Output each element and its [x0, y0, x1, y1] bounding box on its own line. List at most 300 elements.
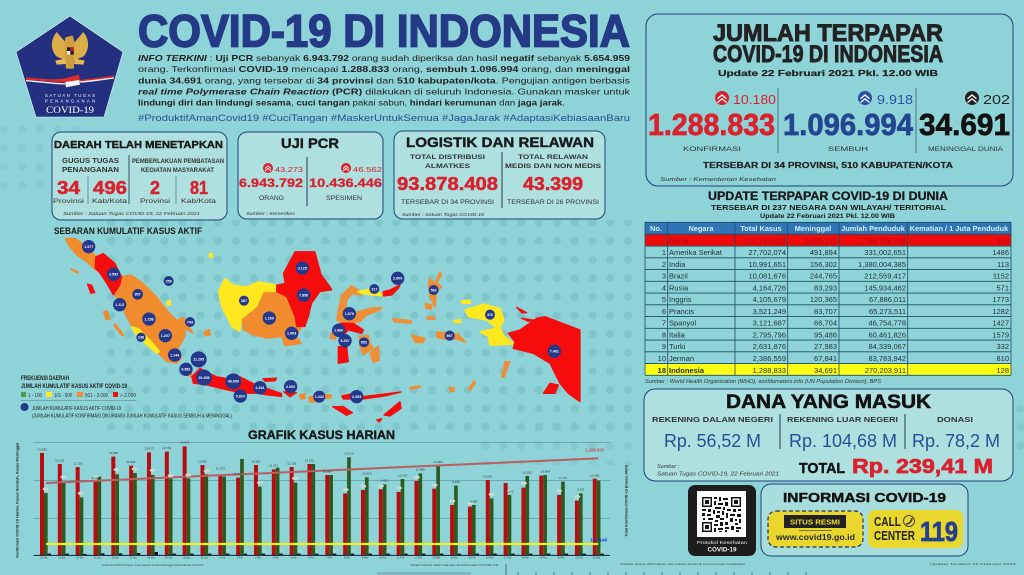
heading: DANA YANG MASUK [726, 392, 931, 413]
value labels over bars: 11.992 [252, 459, 261, 463]
logo text: SATUAN TUGAS [45, 93, 95, 98]
date axis labels: 21 Feb [575, 558, 583, 560]
source: Sumber : [657, 464, 680, 470]
map markers: active case bubbles: 1.960 [334, 329, 343, 333]
text block: info terkini [138, 53, 631, 108]
rows: countries: 1773 [992, 295, 1009, 304]
date axis labels: 18 Feb [522, 558, 530, 560]
heading: world update: UPDATE TERPAPAR COVID-19 DI DUNIA [708, 191, 948, 203]
row: dunia: 315 [996, 236, 1009, 246]
date axis labels: 28 Jan [147, 558, 155, 560]
row: indonesia: 128 [996, 366, 1009, 375]
deltas: 46.562 [353, 165, 382, 174]
value labels over bars: 11.992 [198, 459, 207, 463]
map markers: active case bubbles: 957 [135, 293, 141, 297]
row: dunia [669, 236, 1009, 246]
value labels over bars: 8.231 [577, 488, 585, 492]
map markers: active case bubbles [82, 240, 561, 403]
rows: countries: Jerman [669, 354, 694, 363]
rows: countries: 27,983 [814, 342, 837, 351]
rows: countries: 4,105,679 [753, 295, 786, 304]
map legend: JUMLAH KUMULATIF KASUS AKTIF COVID-19 [32, 406, 121, 412]
rows: countries: 3 [662, 272, 666, 281]
big figures: 1.288.833 [648, 107, 775, 142]
date axis labels [40, 558, 601, 560]
value labels over bars: 10.355 [362, 472, 372, 476]
total: TOTAL [799, 460, 845, 477]
map markers: active case bubbles: 48.650 [228, 380, 239, 384]
subheads: TOTAL DISTRIBUSI [410, 154, 485, 161]
heading: chart: GRAFIK KASUS HARIAN [248, 428, 395, 442]
table source: Sumber : World Health Organization (WHO), worldometers.info (UN Population Division), BPS [645, 379, 881, 385]
value labels over bars: 10.133 [398, 473, 408, 477]
map markers: active case bubbles: 7.461 [550, 350, 559, 354]
date axis labels: 4 Feb [273, 558, 279, 560]
map markers: active case bubbles: 11.195 [193, 358, 204, 362]
heading: COVID-19 DI INDONESIA [713, 41, 943, 68]
date axis labels: 24 Jan [76, 558, 84, 560]
table header: Total Kasus [740, 224, 782, 233]
panel: dana yang masuk [644, 389, 1013, 481]
value labels over bars: 11.726 [287, 461, 296, 465]
map markers: active case bubbles: 2.092 [286, 385, 295, 389]
row: dunia: Dunia [669, 236, 689, 246]
text block: info terkini: dunia 34.691 orang, yang tersebar di 34 provinsi dan 510 kabupaten/kota . Pengujian antigen berbasis [138, 76, 630, 86]
deltas: 9.918 [877, 92, 913, 107]
table header: Kematian / 1 Juta Penduduk [910, 224, 1009, 233]
chart footnotes: Konfirmasi COVID-19 Harian, Kasus Sembuh & Kasus Meninggal Total Konfirmasi COVID-19 [102, 563, 204, 567]
subheads: GUGUS TUGAS [62, 158, 119, 165]
row: indonesia: 270,203,911 [865, 366, 906, 375]
map markers: active case bubbles: 1.603 [287, 332, 296, 336]
map markers: active case bubbles: 2.592 [109, 273, 118, 277]
map markers: active case bubbles: 5.824 [236, 394, 246, 398]
value labels over bars: 12.125 [55, 458, 65, 462]
big figures: 34.691 [919, 107, 1010, 142]
labels [259, 196, 362, 202]
map markers: active case bubbles: 258 [166, 279, 172, 283]
map markers: active case bubbles: 2.609 [393, 277, 402, 281]
big figures: 1.096.994 [783, 107, 914, 142]
figure labels: MENINGGAL DUNIA [928, 146, 1004, 153]
figures: 6.943.792 [239, 176, 303, 190]
value labels over bars: 11.903 [434, 460, 443, 464]
value labels over bars: 11.903 [127, 460, 136, 464]
heading [713, 20, 943, 68]
value labels over bars: 13.673 [144, 447, 154, 451]
total [799, 456, 993, 478]
map legend: > 2.000 [120, 393, 136, 399]
rows: countries: 4 [662, 284, 666, 292]
rows: countries: 212,559,417 [864, 272, 906, 281]
map legend: FREKUENSI DAERAH [21, 376, 69, 382]
value labels over bars: 13.010 [344, 452, 354, 456]
rows: countries: 1 [662, 248, 666, 257]
notes: TERSEBAR DI 34 PROVINSI [401, 200, 494, 206]
data label chips [43, 467, 580, 505]
heading: JUMLAH TERPAPAR [713, 20, 943, 47]
rows: countries: 7 [662, 319, 666, 328]
subheads: REKENING DALAM NEGERI [652, 415, 773, 424]
value labels over bars [37, 441, 600, 503]
date axis labels: 3 Feb [255, 558, 262, 560]
panel: informasi covid-19 [761, 484, 968, 556]
heading: UJI PCR [281, 135, 339, 151]
value labels over bars: 9.425 [381, 479, 389, 483]
map: west Indonesia [65, 238, 332, 402]
map markers: active case bubbles: 652 [361, 341, 367, 345]
figure labels [683, 146, 1004, 153]
notes: TERSEBAR DI 26 PROVINSI [507, 200, 599, 206]
table header: Jumlah Penduduk [841, 224, 906, 233]
source: Sumber : Satuan Tugas COVID-19 [402, 212, 484, 218]
numbers: 2 [150, 178, 160, 198]
caption [697, 540, 748, 554]
figure labels: SEMBUH [828, 146, 868, 153]
value labels over bars: 10.310 [233, 472, 243, 476]
row: dunia: 2,455,131 [804, 236, 837, 246]
rows: countries: 60,461,826 [868, 330, 906, 340]
unit labels: Kab/Kota [181, 198, 216, 205]
value labels over bars: 13.585 [37, 447, 47, 451]
map markers: active case bubbles: 387 [241, 299, 247, 303]
badge: situs resmi [768, 511, 863, 547]
rows: countries: 1,380,004,385 [858, 260, 906, 269]
notes [401, 200, 599, 206]
value labels over bars: 10.180 [590, 474, 600, 478]
rows: countries: Rusia [669, 284, 689, 292]
rows: countries: 5 [662, 295, 666, 304]
table header: Meninggal [795, 224, 831, 233]
rows: countries: 27,702,074 [748, 248, 786, 257]
date axis labels: 17 Feb [504, 558, 512, 560]
icon: QR code [702, 497, 741, 532]
rows: countries [658, 248, 1009, 363]
deltas: 43.273 [275, 165, 303, 174]
date axis labels: 9 Feb [362, 558, 369, 560]
map markers: active case bubbles: 138 [138, 336, 144, 340]
row: indonesia: 34,691 [814, 366, 837, 375]
map legend: 101 - 500 [54, 393, 72, 399]
rows: countries: 2,631,876 [753, 342, 786, 351]
table header: No. [650, 224, 662, 233]
subheads: MEDIS DAN NON MEDIS [505, 163, 602, 170]
badge: call center 119: 119 [920, 516, 958, 547]
numbers: 496 [93, 178, 127, 198]
panel: uji PCR [238, 132, 383, 219]
rows: countries: 95,486 [814, 330, 837, 340]
rows: countries: India [669, 260, 686, 269]
logo: Satgas COVID-19 pentagon [16, 16, 123, 117]
rows: countries: 1282 [992, 307, 1009, 316]
rows: countries: 83,783,942 [868, 354, 906, 363]
icon: up chevrons blue [858, 91, 872, 105]
figures [239, 176, 382, 190]
unit labels [53, 198, 216, 205]
numbers: 81 [190, 178, 208, 198]
subheads: TOTAL RELAWAN [518, 154, 588, 161]
row: dunia: 7,794,798,739 [858, 236, 906, 246]
map markers: active case bubbles: 793 [187, 320, 193, 324]
value labels over bars: 12.125 [305, 458, 314, 462]
hashtags: #ProduktifAmanCovid19 #CuciTangan #MaskerUntukSemua #JagaJarak #AdaptasiKebiasaanBaru [138, 113, 630, 123]
badge: situs resmi: www.covid19.go.id [775, 533, 855, 542]
rows: countries: Prancis [669, 307, 694, 316]
map markers: active case bubbles: 1.377 [84, 245, 93, 249]
date axis labels: 26 Jan [112, 558, 120, 560]
rows: countries: 67,886,011 [869, 295, 906, 304]
y axis title right: Total Konfirmasi COVID-19 (Kasus Aktif) [625, 465, 629, 537]
date axis labels: 16 Feb [486, 558, 494, 560]
rows: countries: 1579 [992, 330, 1009, 340]
table header: Negara [688, 224, 714, 233]
date axis labels: 11 Feb [397, 558, 405, 560]
subheads [410, 154, 602, 170]
date axis labels: 22 Jan [40, 558, 48, 560]
badge: call center 119 [868, 510, 963, 548]
spread note: TERSEBAR DI 34 PROVINSI, 510 KABUPATEN/KOTA [703, 161, 953, 170]
date axis labels: 30 Jan [183, 558, 191, 560]
map markers: active case bubbles: 3.207 [340, 339, 350, 343]
rows: countries: Brazil [669, 272, 688, 281]
map markers: active case bubbles: 470 [487, 313, 493, 317]
date axis labels: 22 Feb [593, 558, 601, 560]
heading: INFORMASI COVID-19 [783, 491, 946, 505]
text block: info terkini: lindungi diri dan lindungi sesama , cuci tangan pakai sabun, hindari kerumunan dan jaga jarak . [138, 98, 565, 108]
rows: countries: Spanyol [669, 319, 696, 328]
value labels over bars: 13.762 [162, 446, 172, 450]
rows: countries: 3,121,687 [753, 319, 786, 328]
date axis labels: 19 Feb [540, 558, 548, 560]
rows: countries: Inggris [669, 295, 692, 304]
heading: world update: Update 22 Februari 2021 Pkl. 12.00 WIB [760, 213, 895, 220]
rows: countries: 83,707 [814, 307, 837, 316]
map legend: (JUMLAH KUMULATIF KONFIRMASI DIKURANGI JUMLAH KUMULATIF KASUS SEMBUH & MENINGGAL) [32, 414, 232, 420]
map markers: active case bubbles: 3.125 [298, 266, 307, 270]
map legend: 1 - 100 [28, 393, 42, 399]
panel: jumlah terpapar [646, 14, 1013, 186]
icon: up chevrons red [341, 163, 351, 173]
map markers: active case bubbles: 1.679 [345, 312, 354, 316]
rows: countries: 156,302 [810, 260, 837, 269]
map markers: active case bubbles: 1.144 [170, 353, 180, 357]
subheads [62, 158, 224, 174]
amounts: Rp. 104,68 M [789, 431, 897, 451]
figures: 93.878.408 [397, 174, 498, 194]
rows: countries: 1486 [992, 248, 1009, 257]
chart footnotes [102, 562, 1017, 567]
deltas: 10.180 [733, 92, 776, 107]
map markers: active case bubbles: 562 [431, 288, 437, 292]
labels: ORANG [259, 196, 284, 202]
figure labels: KONFIRMASI [683, 146, 741, 153]
deltas [275, 165, 382, 174]
unit labels: Kab/Kota [92, 198, 127, 205]
text block: info terkini: orang. Terkonfirmasi COVID-19 mencapai 1.288.833 orang, sembuh 1.096.994 orang, dan meninggal [138, 64, 630, 74]
rows: countries: 571 [996, 284, 1009, 292]
icon: flag ribbon [26, 75, 114, 87]
table header [650, 224, 1009, 233]
icon: up chevrons red [715, 91, 729, 105]
logo text [45, 93, 95, 116]
end label: total: 1.288.833 [585, 447, 605, 452]
badge: call center 119: CENTER [874, 528, 915, 543]
trend line: active [46, 458, 598, 483]
rows: countries: 10,081,676 [748, 272, 786, 281]
value labels over bars: 9.779 [559, 476, 567, 480]
bar chart: daily cases [16, 441, 629, 560]
heading: world update: TERSEBAR DI 237 NEGARA DAN WILAYAH/ TERITORIAL [711, 203, 946, 212]
rows: countries: 6 [662, 307, 666, 316]
chart footnotes: Sumber Kasus Aktif Harian dan Kasus Sembuh Kementerian Kesehatan [620, 562, 746, 566]
numbers [57, 178, 208, 198]
map: east Indonesia [320, 272, 580, 422]
panel: daerah telah menetapkan [52, 132, 227, 220]
rows: countries: 332 [996, 342, 1009, 351]
rows: countries: 8 [662, 330, 666, 340]
red bars: confirmed [40, 446, 597, 555]
rows: countries: 65,273,511 [869, 307, 906, 316]
logo text: COVID-19 [46, 106, 94, 116]
map markers: active case bubbles: 317 [371, 287, 377, 291]
date axis labels: 14 Feb [450, 558, 458, 560]
chart footnotes: Update Terakhir 22 Februari 2021 [930, 562, 1017, 566]
rows: countries: 2,795,796 [753, 330, 786, 340]
amounts [664, 431, 1000, 451]
figures: 43.399 [523, 174, 583, 194]
end label: active: 157.148 [590, 538, 608, 543]
rows: countries: 491,894 [810, 248, 837, 257]
row: indonesia [658, 366, 1009, 375]
source: Sumber : Kemenkes [246, 211, 296, 217]
green bars: recovered [44, 457, 600, 555]
value labels over bars: 9.248 [452, 480, 460, 484]
map markers: active case bubbles: 667 [447, 334, 453, 338]
chart footnotes: Total Kasus Aktif Harian Konfirmasi COVID-19 [410, 563, 499, 567]
date axis labels: 13 Feb [433, 558, 441, 560]
rows: countries: 10 [658, 354, 666, 363]
title: COVID-19 DI INDONESIA [138, 6, 630, 56]
rows: countries: 67,841 [814, 354, 837, 363]
subheads: DONASI [937, 415, 973, 424]
rows: countries: 10,991,651 [748, 260, 786, 269]
date axis labels: 27 Jan [129, 558, 137, 560]
badge: call center 119: CALL [874, 514, 901, 529]
rows: countries: 2 [662, 260, 666, 269]
date axis labels: 7 Feb [326, 558, 333, 560]
rows: countries: 4,164,726 [753, 284, 786, 292]
rows: countries: 66,704 [814, 319, 837, 328]
heading: world update [708, 191, 948, 220]
heading: LOGISTIK DAN RELAWAN [406, 134, 594, 150]
deltas [733, 92, 1010, 107]
source: Sumber : Kementerian Kesehatan [660, 177, 776, 183]
map markers: active case bubbles: 2.253 [352, 395, 361, 399]
date axis labels: 25 Jan [94, 558, 102, 560]
unit labels: Provinsi [140, 198, 170, 205]
row: indonesia: Indonesia [669, 366, 705, 375]
map legend: 501 - 2.000 [85, 393, 108, 399]
table: world cases [645, 222, 1011, 375]
rows: countries: 331,002,651 [864, 248, 906, 257]
subheads [652, 415, 973, 424]
badge: situs resmi: SITUS RESMI [790, 518, 840, 526]
rows: countries: 810 [996, 354, 1009, 363]
icon: up chevrons black [965, 91, 979, 105]
icon: up chevrons red [263, 163, 273, 173]
date axis labels: 12 Feb [415, 558, 423, 560]
deltas: 202 [983, 92, 1010, 107]
map markers: active case bubbles: 1.112 [115, 303, 124, 307]
labels: SPESIMEN [326, 196, 362, 202]
figures [397, 174, 583, 194]
date axis labels: 15 Feb [468, 558, 476, 560]
text block: info terkini: INFO TERKINI : Uji PCR sebanyak 6.943.792 orang sudah diperiksa dan hasil negatif sebanyak 5.654.959 [138, 53, 630, 63]
caption: COVID-19 [708, 548, 737, 554]
map markers: active case bubbles: 7.856 [299, 293, 308, 297]
date axis labels: 29 Jan [165, 558, 173, 560]
value labels over bars: 11.417 [269, 464, 278, 468]
subheads: REKENING LUAR NEGERI [787, 415, 898, 424]
map legend [20, 376, 232, 420]
value labels over bars: 10.664 [323, 469, 332, 473]
figures: 10.436.446 [309, 176, 382, 190]
logo text: PENANGANAN [45, 98, 95, 104]
subheads: KEGIATAN MASYARAKAT [141, 167, 214, 174]
date axis labels: 20 Feb [557, 558, 565, 560]
value labels over bars: 10.753 [216, 467, 225, 471]
rows: countries: 244,765 [810, 272, 837, 281]
rows: countries: 2,386,559 [753, 354, 786, 363]
update line: Update 22 Februari 2021 Pkl. 12.00 WIB [718, 69, 938, 78]
value labels over bars: 14.470 [180, 441, 190, 445]
QR card [688, 485, 756, 556]
date axis labels: 6 Feb [308, 558, 315, 560]
map markers: active case bubbles: 1.160 [265, 316, 274, 320]
amounts: Rp. 78,2 M [912, 431, 1000, 451]
subheads: ALMATKES [425, 163, 471, 170]
date axis labels: 10 Feb [379, 558, 387, 560]
numbers: 34 [57, 178, 80, 198]
death-count chips [48, 547, 605, 552]
rows: countries: 84,339,067 [868, 342, 906, 351]
y axis title left: Konfirmasi COVID-19 Harian, Kasus Sembuh, Kasus Meninggal [16, 443, 20, 558]
date axis labels: 2 Feb [237, 558, 244, 560]
map markers: active case bubbles: 1.207 [161, 334, 170, 338]
source [657, 464, 779, 478]
rows: countries: 83,293 [814, 284, 837, 292]
date axis labels: 31 Jan [201, 558, 209, 560]
value labels over bars: 11.726 [73, 461, 82, 465]
value labels over bars: 13.098 [109, 451, 118, 455]
rows: countries: 113 [997, 260, 1009, 269]
map markers: active case bubbles: 1.442 [315, 395, 324, 399]
subheads: PENANGANAN [62, 167, 119, 174]
source: Sumber : Satuan Tugas COVID-19, 22 Februari 2021 [63, 211, 200, 217]
unit labels: Provinsi [53, 198, 84, 205]
heading: DAERAH TELAH MENETAPKAN [54, 139, 223, 151]
rows: countries: 120,365 [810, 295, 837, 304]
panel: logistik dan relawan [394, 131, 605, 219]
total: Rp. 239,41 M [852, 456, 993, 478]
rows: countries: 145,934,462 [864, 284, 906, 292]
value labels over bars: 10.664 [541, 469, 550, 473]
source: Satuan Tugas COVID-19, 22 Februari 2021 [657, 472, 779, 478]
map legend: JUMLAH KUMULATIF KASUS AKTIF COVID-19 [21, 384, 128, 390]
map markers: active case bubbles: 1.158 [144, 317, 154, 321]
rows: countries: Turki [669, 342, 686, 351]
rows: countries: 1152 [993, 272, 1009, 281]
